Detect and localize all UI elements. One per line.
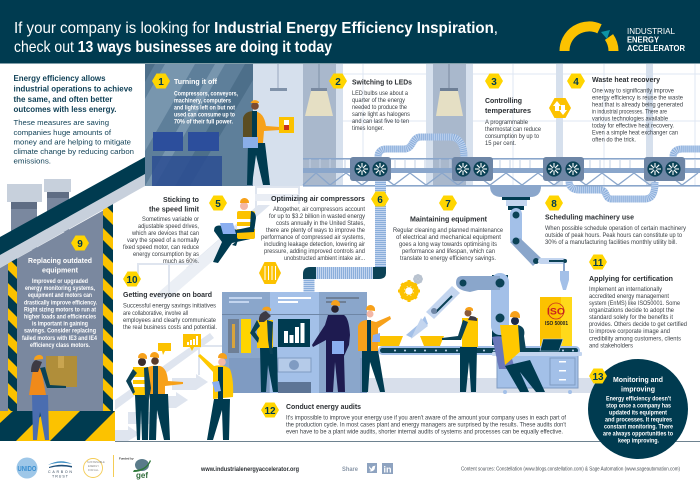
item 2: LEDs: quarter of the energy: [352, 98, 405, 104]
item 7: maintaining equipment: goes a long way towards optimising its: [399, 242, 497, 248]
lamps: [270, 64, 463, 116]
item 5: speed limit: adjustable speed drives,: [138, 224, 199, 230]
woman at machine: [250, 307, 278, 392]
item 6: air compressors: Optimizing air compressors: [271, 194, 365, 203]
GEF logo: gef: [136, 471, 148, 480]
item 4: waste heat recovery: Waste heat recovery: [592, 75, 661, 84]
item 12: energy audits: [261, 402, 566, 436]
item 8: scheduling machinery: 8: [551, 199, 557, 210]
item 6: air compressors: pressure, adding improved controls and: [264, 249, 365, 255]
worker carrying box: [29, 355, 77, 440]
item 4: waste heat recovery: in industrial processes. There are: [592, 110, 668, 116]
icon: temperature arrows: [549, 98, 571, 118]
item 2: LEDs: times longer.: [352, 126, 384, 132]
item 5: speed limit: the speed limit: [149, 204, 199, 214]
fan units: [350, 157, 685, 181]
item 11: certification: and stakeholders: [589, 344, 633, 350]
factory windows background: [253, 64, 700, 186]
machine block: [222, 292, 367, 393]
item 8: scheduling machinery: Scheduling machinery use: [545, 212, 634, 222]
item 3: controlling temperatures: 15 per cent.: [485, 141, 516, 147]
footer logos: [16, 455, 151, 480]
item 6: air compressors: Altogether, air compressors account: [273, 207, 365, 213]
GEF logo: [119, 456, 151, 480]
item 5: speed limit: much as 60%.: [163, 259, 199, 265]
item 6: air compressors: including leakage detection, lowering air: [264, 242, 365, 248]
item 10: everyone on board: Successful energy savings initiatives: [123, 304, 216, 310]
item 11: certification: standard solely for the benefits it: [589, 315, 673, 321]
item 10: everyone on board: the real business costs and potential.: [123, 325, 217, 331]
upper robot arm: [490, 186, 569, 290]
UNIDO logo: UNIDO: [18, 466, 37, 473]
item 3: controlling temperatures: consumption by up to: [485, 134, 540, 140]
Carbon Trust logo: TRUST: [52, 474, 69, 478]
left intro text: [14, 74, 134, 166]
item 9: replacing outdated equipment: Right sizing motors to run at: [24, 307, 96, 313]
item 11: certification: 11: [593, 258, 604, 269]
Carbon Trust logo: CARBON: [48, 470, 72, 474]
Sustainable energy logo: FOR ALL: [88, 468, 99, 472]
item 5: speed limit: Sometimes variable or: [142, 217, 199, 223]
item 13: monitoring circle: Monitoring and: [613, 375, 663, 384]
item 3: controlling temperatures: temperatures: [485, 106, 531, 115]
gears: [398, 274, 423, 302]
icon: sliders: [259, 262, 281, 284]
item 13: monitoring circle: are always opportunities to: [603, 432, 673, 438]
item 2: LEDs: LED bulbs use about a: [352, 91, 409, 97]
item 2: LEDs: [329, 74, 412, 132]
item 9: replacing outdated equipment: equipment: [42, 266, 78, 274]
overhead catwalk truss: [303, 158, 700, 187]
Sustainable energy logo: [84, 458, 105, 478]
item 10: everyone on board: are collaborative, involve all: [123, 311, 188, 317]
item 8: scheduling machinery: 30% of a manufacturing facilities monthly utility bill.: [545, 240, 677, 246]
item 13: monitoring circle: stop once a company has: [606, 404, 672, 410]
item 6: air compressors: there are plenty of ways to improve the: [266, 228, 366, 234]
item 8: scheduling machinery: When possible schedule operation of certain machinery: [545, 226, 686, 232]
logo: Industrial Energy Accelerator: ENERGY: [627, 34, 659, 44]
item 7: maintaining equipment: of electrical and mechanical equipment: [396, 235, 501, 241]
item 9: replacing outdated equipment: energy monitoring systems,: [25, 286, 95, 292]
Sustainable energy logo: SUSTAINABLE: [87, 460, 105, 464]
item 9: replacing outdated equipment: Replacing outdated: [28, 256, 92, 265]
item 13: monitoring circle: constant monitoring. There: [604, 424, 674, 430]
item 13: monitoring circle: 13: [592, 372, 604, 383]
content sources: Content sources: Constellation (www.blogs.constellation.com) & Sage Automation (www.sageautomation.com): [461, 466, 680, 472]
website url: www.industrialenergyaccelerator.org: [200, 466, 299, 473]
item 9: replacing outdated equipment: [22, 236, 98, 349]
worker at light switch: [243, 100, 294, 185]
item 12: energy audits: the production cycle. In most cases plant and energy managers are surprised by the results. These audits don't: [286, 423, 566, 429]
item 11: certification: Applying for certification: [589, 274, 673, 283]
item 13: monitoring circle: and processes. It requires: [605, 418, 673, 424]
left intro text: These measures are saving: [14, 118, 109, 127]
panel 1: turning it off: [145, 64, 253, 186]
left intro text: climate change by reducing carbon: [14, 147, 134, 156]
item 4: waste heat recovery: [567, 74, 684, 144]
item 13: monitoring circle: keep improving.: [618, 438, 659, 444]
panel 1: turning it off: 70% of their full power.: [174, 120, 233, 126]
linkedin icon: in: [384, 464, 392, 474]
item 5: speed limit: energy consumption by as: [133, 252, 199, 258]
item 10: everyone on board: [123, 272, 217, 331]
Sustainable energy logo: ENERGY: [88, 464, 99, 468]
item 13: monitoring circle: improving: [621, 384, 655, 394]
item 4: waste heat recovery: various technologies available: [592, 116, 669, 122]
man in suit: [312, 300, 350, 392]
item 11: certification: credibility among customers, clients: [589, 336, 681, 342]
item 11: certification: Implement an internationally: [589, 287, 662, 293]
item 9: replacing outdated equipment: failed motors with IE3 and IE4: [22, 336, 98, 342]
number 1: [152, 74, 170, 88]
item 9: replacing outdated equipment: higher loads and efficiencies: [24, 314, 97, 320]
twitter icon: [367, 463, 377, 473]
item 9: replacing outdated equipment: efficiency class motors.: [30, 343, 90, 349]
item 4: waste heat recovery: Even a simple heat exchanger can: [592, 130, 678, 136]
title: check out 13 ways businesses are doing it today: [14, 39, 332, 56]
item 9: replacing outdated equipment: 9: [77, 239, 83, 250]
item 4: waste heat recovery: often do the trick.: [592, 138, 636, 144]
title: If your company is looking for Industrial Energy Efficiency Inspiration,: [14, 20, 498, 37]
item 9: replacing outdated equipment: is important in gaining: [32, 322, 88, 328]
ISO certificate: ISO: [547, 306, 565, 318]
item 2: LEDs: and can last five to ten: [352, 119, 409, 125]
item 8: scheduling machinery: [545, 196, 686, 246]
item 12: energy audits: 12: [264, 406, 276, 417]
GEF logo: Funded by: [119, 456, 134, 460]
item 13: monitoring circle: Energy efficiency doesn't: [606, 396, 671, 402]
item 7: maintaining equipment: Maintaining equipment: [410, 214, 487, 224]
item 8: scheduling machinery: outside of peak hours. Peak hours can constitute up to: [545, 233, 683, 239]
item 6: air compressors: 6: [377, 195, 383, 206]
ISO certificate: [540, 297, 572, 347]
panel 1: turning it off: and lights left on but not: [174, 106, 235, 112]
item 6: air compressors: performance of compressed air systems,: [261, 235, 365, 241]
item 2: LEDs: same light as halogens: [352, 112, 410, 118]
item 12: energy audits: It's impossible to improve your energy use if you aren't aware of the amount your company uses in each part of: [286, 416, 566, 422]
share icons: [342, 463, 393, 474]
item 7: maintaining equipment: [393, 196, 504, 262]
item 9: replacing outdated equipment: savings. Consider replacing: [24, 329, 96, 335]
conveyor belt with boxes: [378, 336, 580, 355]
item 11: certification: to improve corporate image and: [589, 329, 670, 335]
item 12: energy audits: even have to be a plant wide audits, shorter internal audits of systems and processes can be equally effective.: [286, 430, 563, 436]
chart screen: [278, 319, 310, 347]
logo: Industrial Energy Accelerator: INDUSTRIAL: [627, 26, 675, 36]
item 11: certification: system (EnMS) like ISO50001. Some: [589, 301, 681, 307]
share icons: Share: [342, 467, 359, 473]
lower robot arm: [406, 273, 509, 345]
item 13: monitoring circle: updated its equipment: [609, 410, 667, 416]
item 10: everyone on board: Getting everyone on board: [123, 290, 212, 299]
item 2: LEDs: needed to produce the: [352, 105, 408, 111]
worker in orange: [358, 305, 391, 392]
baseline divider: [115, 441, 700, 442]
item 13: monitoring circle: [588, 359, 688, 459]
item 6: air compressors: costs annually in the United States,: [276, 221, 365, 227]
floor: [367, 378, 600, 393]
item 5: speed limit: Sticking to: [163, 195, 199, 204]
item 5: speed limit: which are devices that can: [131, 231, 199, 237]
speech bubbles: [158, 334, 201, 355]
item 11: certification: [589, 254, 687, 350]
item 10: everyone on board: employees and clearly communicate: [123, 318, 217, 324]
item 10: everyone on board: 10: [126, 275, 138, 286]
item 12: energy audits: Conduct energy audits: [286, 402, 361, 411]
panel 1: turning it off: machinery, computers: [174, 98, 232, 104]
group talking: [126, 334, 233, 440]
item 7: maintaining equipment: 7: [445, 199, 451, 210]
left intro text: emissions.: [14, 156, 51, 166]
item 9: replacing outdated equipment: drastically improve efficiency.: [24, 300, 97, 306]
Carbon Trust logo: [48, 461, 72, 478]
item 7: maintaining equipment: performance and lifespan, which can: [402, 249, 495, 255]
item 5: speed limit: [123, 195, 227, 265]
stairs: [115, 186, 300, 441]
left intro text: Energy efficiency allows: [14, 74, 106, 83]
left intro text: outcomes with less energy.: [14, 105, 116, 114]
item 4: waste heat recovery: today for effective heat recovery.: [592, 124, 674, 130]
left intro text: money and are helping to mitigate: [14, 138, 131, 146]
item 3: controlling temperatures: Controlling: [485, 96, 522, 105]
title: [14, 20, 498, 56]
logo: Industrial Energy Accelerator: ACCELERATOR: [627, 43, 686, 53]
item 6: air compressors: for up to $3.2 billion in wasted energy: [269, 214, 365, 220]
item 2: LEDs: 2: [335, 77, 341, 88]
header band: [0, 0, 700, 64]
ducts: [303, 137, 700, 292]
item 3: controlling temperatures: thermostat can reduce: [485, 127, 542, 133]
item 7: maintaining equipment: Regular cleaning and planned maintenance: [393, 228, 504, 234]
desk with worker: [492, 311, 582, 394]
item 4: waste heat recovery: energy efficiency is reuse the waste: [592, 96, 684, 102]
item 11: certification: provides. Others decide to get certified: [589, 322, 687, 328]
item 6: air compressors: unobstructed ambient intake air...: [284, 256, 365, 262]
item 2: LEDs: Switching to LEDs: [352, 78, 412, 86]
item 11: certification: organizations decide to adopt the: [589, 308, 675, 314]
panel 1: turning it off: used can consume up to: [174, 112, 235, 118]
item 3: controlling temperatures: A programmable: [485, 120, 529, 126]
panel 1: turning it off: Compressors, conveyors,: [174, 92, 238, 98]
ISO certificate: ISO 50001: [545, 321, 568, 327]
left intro text: the same, and often better: [14, 95, 112, 104]
item 9: replacing outdated equipment: Improved or upgraded: [32, 279, 88, 285]
item 6: air compressors: [261, 192, 389, 262]
item 3: controlling temperatures: 3: [491, 77, 497, 88]
panel 1: turning it off: Turning it off: [174, 77, 217, 86]
item 4: waste heat recovery: One way to significantly improve: [592, 88, 675, 94]
item 4: waste heat recovery: 4: [573, 77, 579, 88]
item 7: maintaining equipment: translate to energy efficiency savings.: [400, 256, 496, 262]
woman at conveyor: [442, 307, 478, 392]
item 11: certification: accredited energy management: [589, 294, 669, 300]
item 4: waste heat recovery: heat that is already being generated: [592, 102, 683, 108]
item 5: speed limit: 5: [215, 199, 221, 210]
building with roof: [0, 157, 145, 441]
item 9: replacing outdated equipment: equipment and motors can: [28, 293, 92, 299]
item 5: speed limit: fixed speed motor, can reduce: [123, 245, 200, 251]
left intro text: industrial operations to achieve: [14, 84, 133, 94]
seated worker with laptop: [213, 198, 256, 263]
chimneys: [7, 179, 71, 250]
left intro text: companies huge amounts of: [14, 128, 112, 137]
item 5: speed limit: vary the speed of a normally: [127, 238, 199, 244]
logo: Industrial Energy Accelerator: [564, 26, 686, 53]
number 1: 1: [158, 77, 164, 88]
item 3: controlling temperatures: [485, 74, 542, 147]
